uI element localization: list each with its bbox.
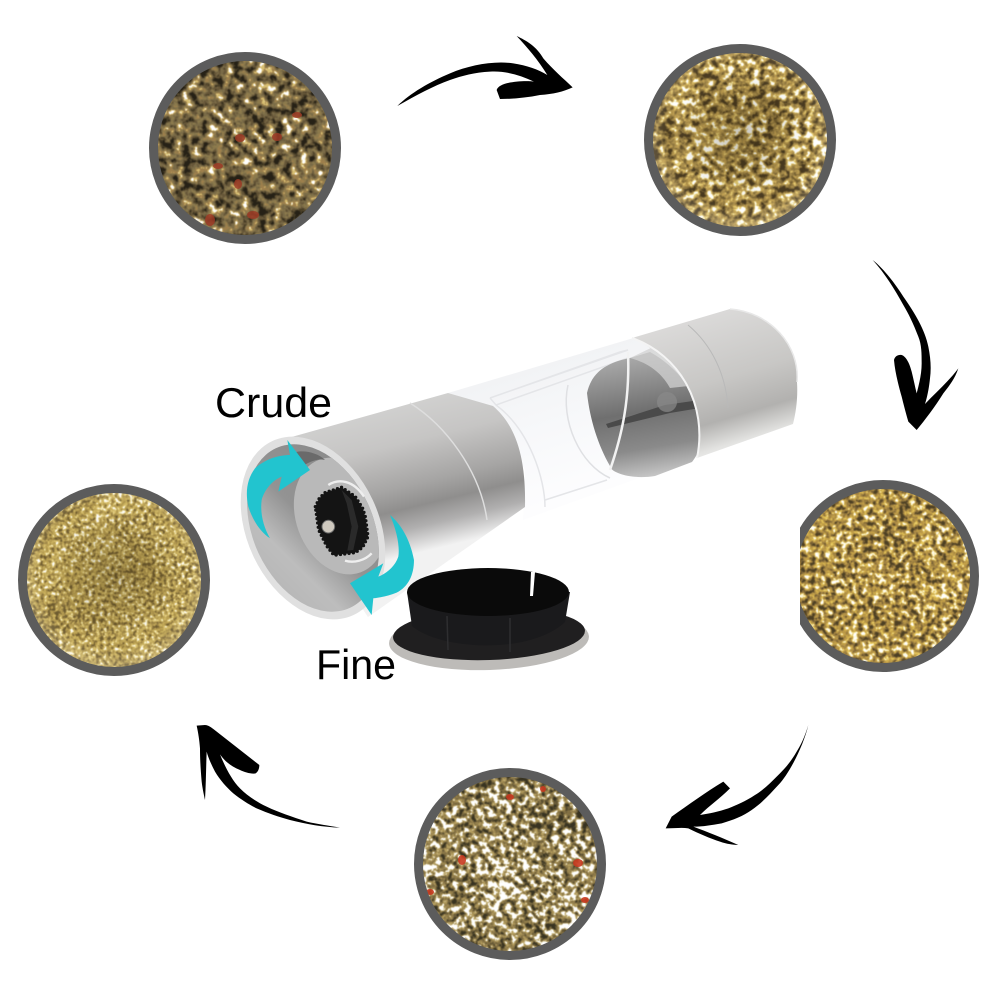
pepper circle 2 — [648, 48, 832, 232]
arrow: circle 4 to circle 5 — [197, 725, 340, 828]
arrow: circle 1 to circle 2 — [397, 36, 573, 106]
pepper circle 3 — [792, 484, 974, 668]
grinder lid — [388, 568, 590, 673]
icon: teal arrow toward fine — [350, 515, 414, 615]
grinder: open end funnel and rim — [240, 436, 385, 620]
label: Crude: Crude — [215, 379, 332, 426]
arrow: circle 3 to circle 4 — [666, 725, 808, 845]
grinder: steel cap at far end — [632, 309, 797, 458]
grinder: dark mechanism seen through glass — [587, 346, 703, 477]
pepper circle 4 — [418, 772, 602, 956]
label: Fine: Fine — [316, 641, 396, 688]
arrow: circle 2 to circle 3 — [873, 260, 958, 430]
icon: teal arrow toward crude — [247, 440, 310, 538]
grinder: clear glass chamber — [448, 337, 699, 520]
pepper circle 5: finest grind — [22, 488, 206, 672]
grinder: adjustment knob — [315, 481, 372, 562]
pepper grinder product — [213, 309, 797, 688]
grinder: steel body near end — [288, 393, 525, 617]
pepper circle 1: coarsest grind — [154, 56, 336, 240]
